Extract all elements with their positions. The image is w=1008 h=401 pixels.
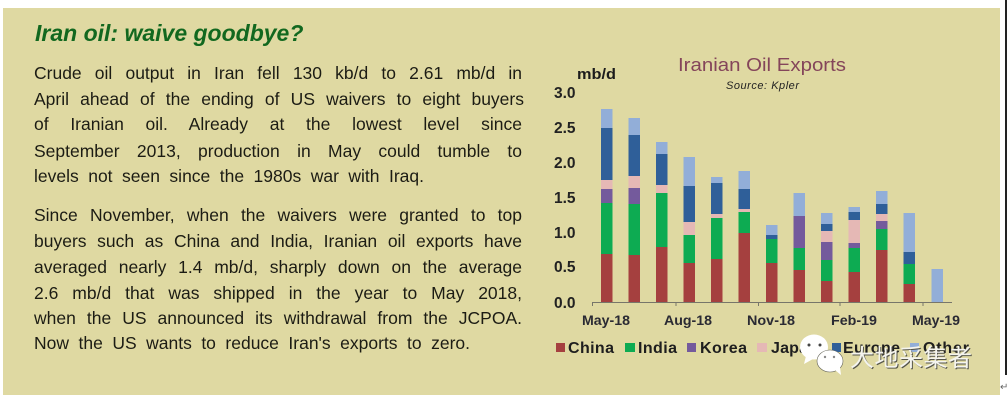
y axis labels <box>554 85 576 312</box>
x axis labels: Aug-18 <box>664 312 712 328</box>
text block: paragraph 2: 2.6 mb/d that was shipped in the year to May 2018, <box>34 283 522 303</box>
text block: paragraph 1 <box>34 63 524 186</box>
text block: paragraph 2 <box>34 205 522 353</box>
legend: Europe <box>843 340 900 357</box>
text block: paragraph 1: of Iranian oil. Already at the lowest level since <box>34 114 522 134</box>
watermark text: 大地采集者 <box>850 338 972 373</box>
text block: paragraph 1: Crude oil output in Iran fell 130 kb/d to 2.61 mb/d in <box>34 63 522 83</box>
y axis labels: 3.0 <box>554 85 576 102</box>
text block: paragraph 2: Since November, when the waivers were granted to top <box>34 205 522 225</box>
chart title: Iranian Oil Exports <box>678 54 846 75</box>
heading: Iran oil: waive goodbye? <box>35 20 303 46</box>
text block: paragraph 2: when the US announced its withdrawal from the JCPOA. <box>34 308 522 328</box>
text block: paragraph 2: averaged nearly 1.4 mb/d, sharply down on the average <box>34 257 522 277</box>
y axis labels: 2.0 <box>554 155 576 172</box>
legend: India <box>638 340 677 357</box>
text block: paragraph 2: Now the US wants to reduce Iran's exports to zero. <box>34 333 470 353</box>
x axis labels <box>582 312 960 328</box>
legend: China <box>568 340 614 357</box>
legend: Korea <box>700 340 747 357</box>
legend: Other <box>923 340 969 357</box>
y axis labels: 2.5 <box>554 120 576 137</box>
x axis <box>592 302 952 306</box>
right edge line <box>1005 0 1007 375</box>
legend <box>556 340 969 357</box>
y axis unit: mb/d <box>577 67 616 83</box>
stacked bars <box>601 109 943 302</box>
y axis labels: 1.5 <box>554 190 576 207</box>
x axis labels: Feb-19 <box>831 312 877 328</box>
text block: paragraph 1: April ahead of the ending of US waivers to eight buyers <box>34 89 524 109</box>
y axis labels: 0.5 <box>554 259 576 276</box>
text block: paragraph 2: buyers such as China and India, Iranian oil exports have <box>34 231 522 251</box>
y axis labels: 0.0 <box>554 295 576 312</box>
x axis labels: May-19 <box>912 312 960 328</box>
text block: paragraph 1: levels not seen since the 1980s war with Iraq. <box>34 166 424 186</box>
icon: WeChat watermark <box>800 334 843 375</box>
y axis labels: 1.0 <box>554 225 576 242</box>
x axis labels: Nov-18 <box>747 312 795 328</box>
legend: Japan <box>771 340 818 357</box>
chart source: Source: Kpler <box>726 80 800 92</box>
watermark text: 大地采集者 <box>851 339 973 374</box>
text block: paragraph 1: September 2013, production in May could tumble to <box>34 141 522 161</box>
x axis labels: May-18 <box>582 312 630 328</box>
